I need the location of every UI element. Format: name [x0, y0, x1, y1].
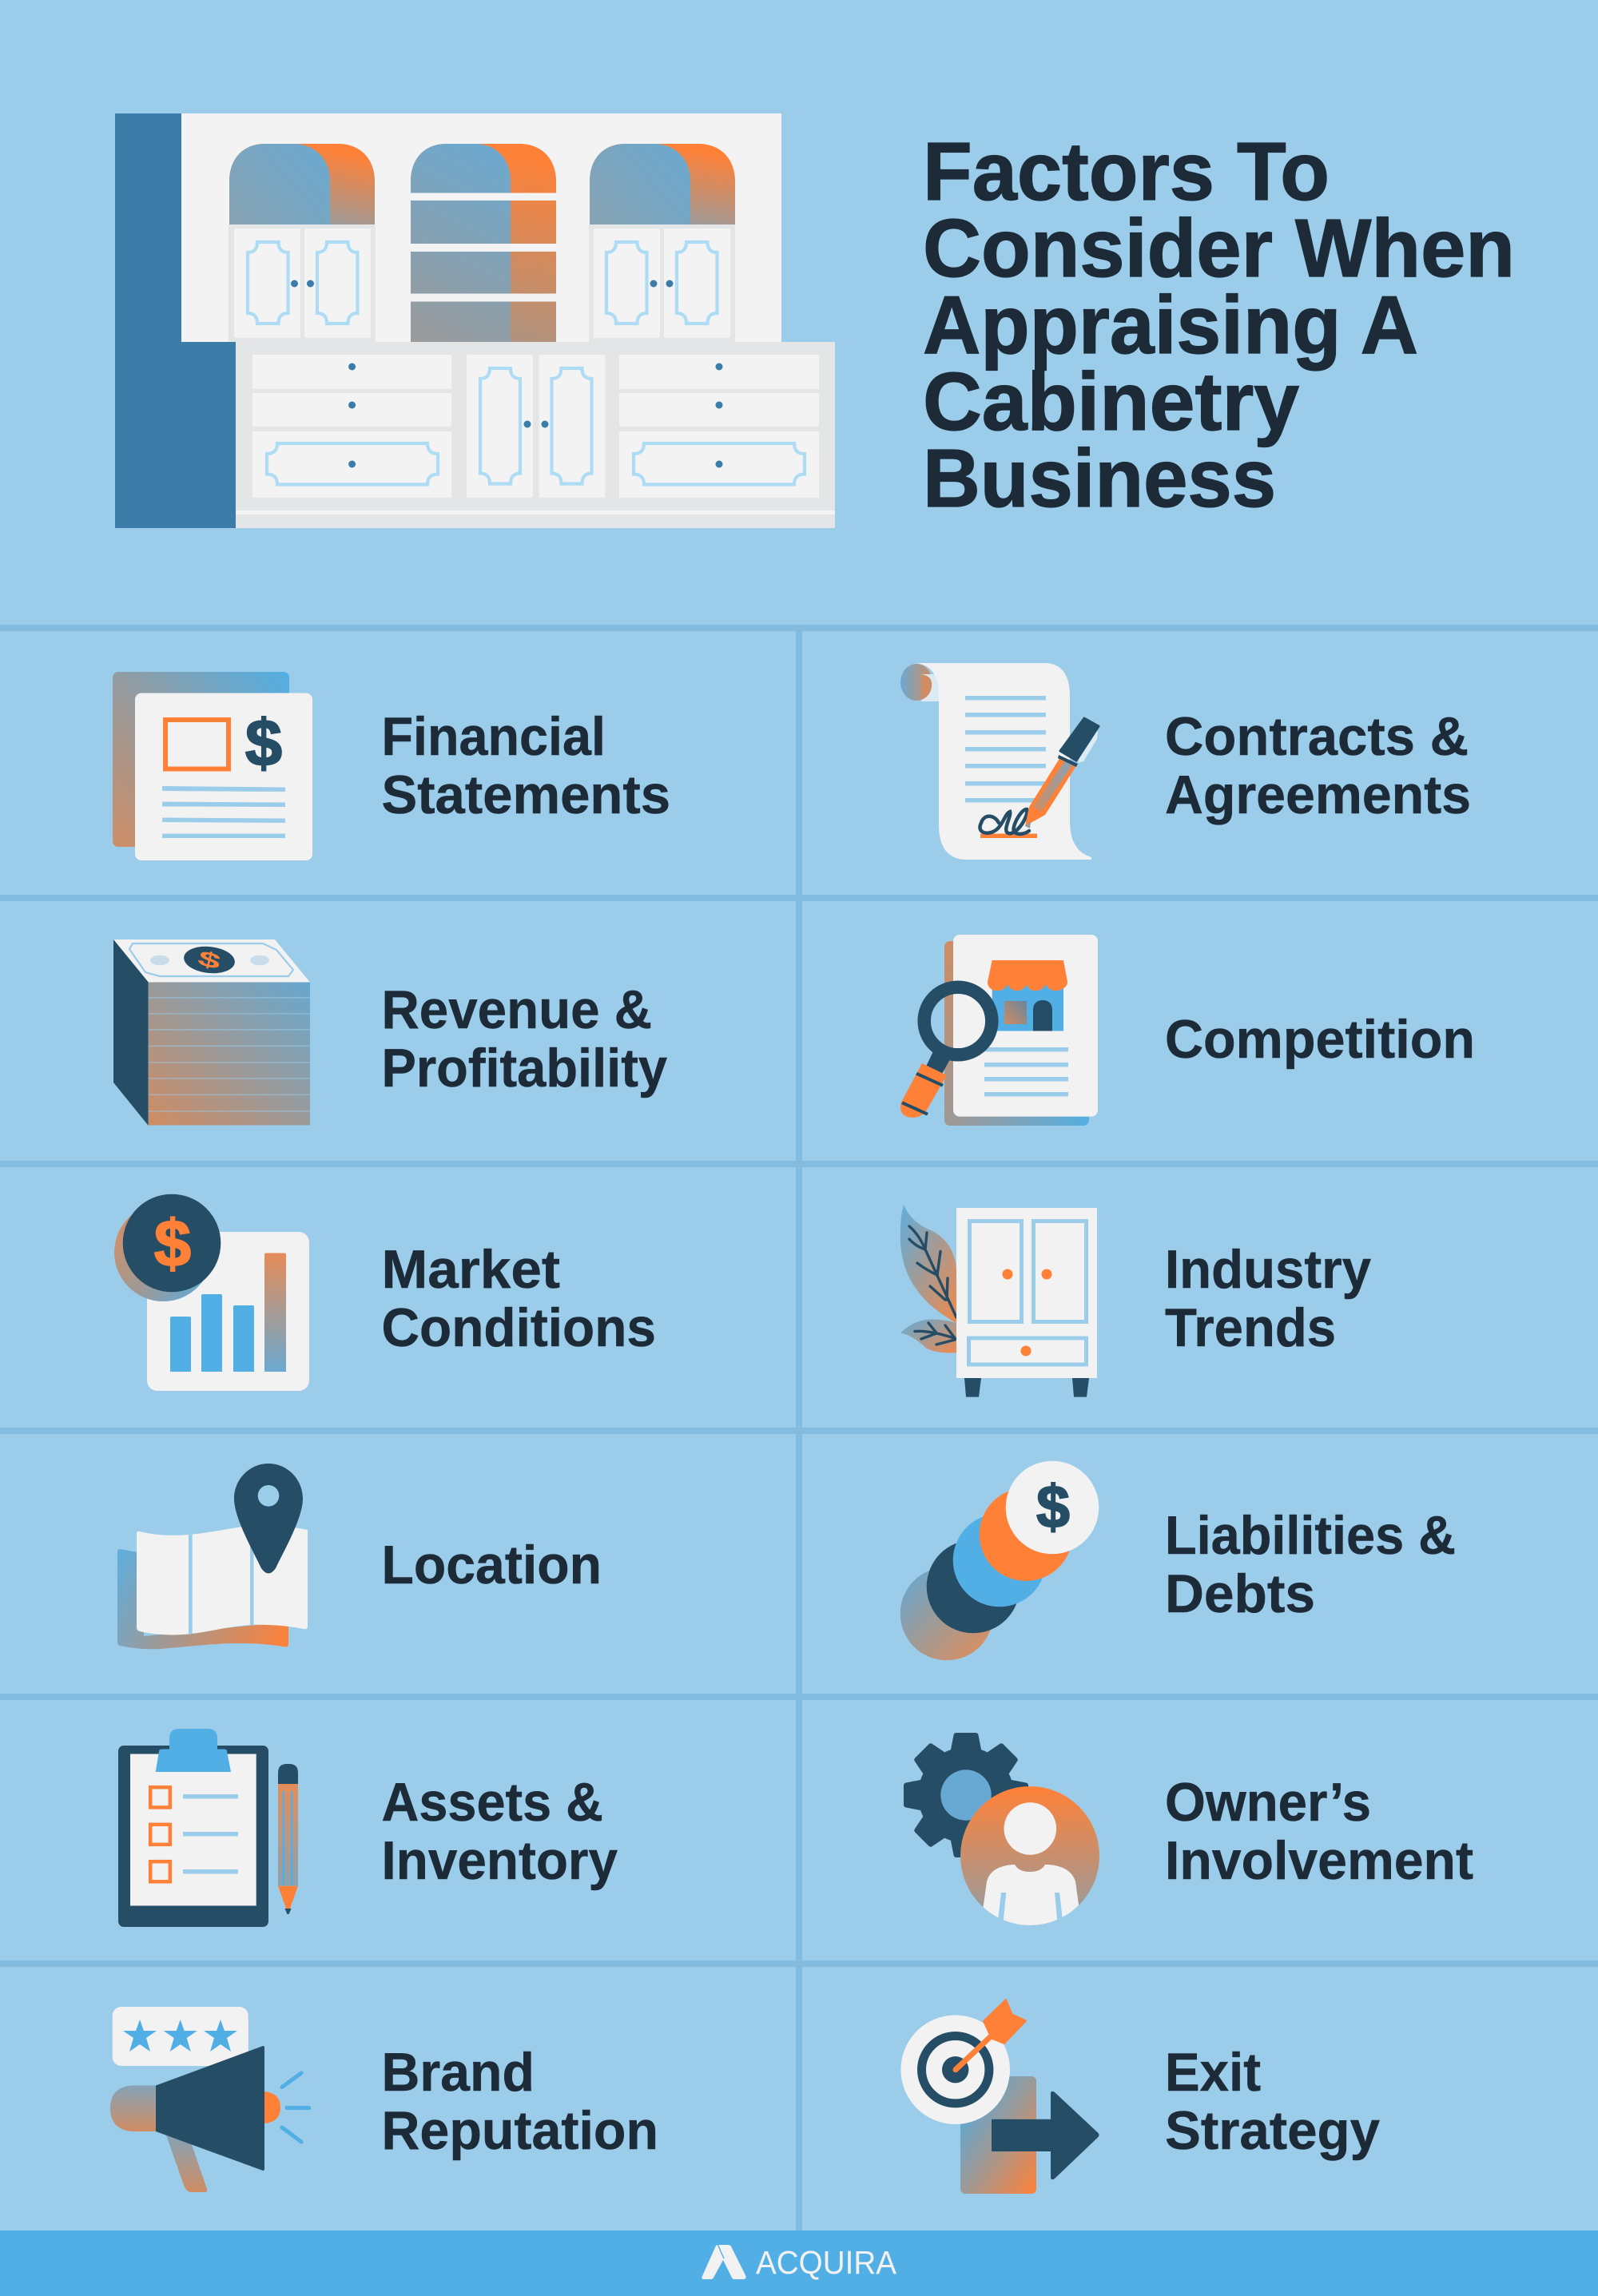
label: Competition: Competition: [1165, 1010, 1475, 1070]
label: Revenue & Profitability: [382, 980, 667, 1098]
label: Market Conditions: Conditions: [382, 1298, 656, 1358]
label: Contracts & Agreements: Contracts &: [1165, 707, 1469, 767]
title: [923, 125, 1515, 524]
label: Brand Reputation: Brand: [382, 2043, 535, 2103]
label: Assets & Inventory: [382, 1773, 618, 1891]
icon: location map: [117, 1464, 308, 1649]
right arch with doors: [589, 144, 735, 342]
icon: contracts: [900, 663, 1099, 860]
icon: market conditions: [114, 1194, 309, 1391]
label: Financial Statements: Statements: [382, 765, 670, 825]
label: Owner's Involvement: Involvement: [1165, 1831, 1473, 1891]
label: Liabilities & Debts: Debts: [1165, 1564, 1315, 1624]
label: Assets & Inventory: Assets &: [382, 1773, 603, 1833]
label: Industry Trends: [1165, 1240, 1371, 1358]
icon: owner gear and person: [904, 1733, 1099, 1933]
icon: money stack: $: [196, 945, 223, 974]
label: Exit Strategy: Exit: [1165, 2043, 1261, 2103]
logo wordmark: ACQUIRA: [756, 2244, 897, 2281]
icon: money stack: [113, 939, 310, 1126]
icon: financial statements: $: [245, 706, 282, 780]
icon: Acquira logo mark: [702, 2245, 746, 2279]
icon: liabilities stacked coins: [900, 1461, 1099, 1660]
illustration: cabinetry hutch: [115, 113, 835, 528]
icon: competition: [900, 935, 1098, 1126]
title: Cabinetry: [923, 356, 1299, 447]
pen: [1025, 718, 1099, 828]
label: Liabilities & Debts: Liabilities &: [1165, 1506, 1456, 1566]
label: Financial Statements: [382, 707, 670, 825]
title: Factors To: [923, 125, 1330, 217]
label: Exit Strategy: Strategy: [1165, 2101, 1380, 2161]
label: Assets & Inventory: Inventory: [382, 1831, 618, 1891]
icon: liabilities stacked coins: $: [1036, 1473, 1070, 1540]
lower cabinet: [236, 342, 835, 528]
label: Contracts & Agreements: [1165, 707, 1471, 825]
label: Liabilities & Debts: [1165, 1506, 1456, 1624]
label: Brand Reputation: Reputation: [382, 2101, 658, 2161]
label: Market Conditions: [382, 1240, 656, 1358]
left arch with doors: [229, 144, 376, 342]
label: Exit Strategy: [1165, 2043, 1380, 2161]
label: Location: Location: [382, 1535, 602, 1595]
title: Appraising A: [923, 279, 1418, 371]
middle open shelves: [411, 144, 556, 342]
label: Financial Statements: Financial: [382, 707, 606, 767]
icon: financial statements: [113, 672, 312, 860]
label: Market Conditions: Market: [382, 1240, 560, 1300]
label: Industry Trends: Trends: [1165, 1298, 1336, 1358]
label: Industry Trends: Industry: [1165, 1240, 1371, 1300]
label: Owner's Involvement: Owner’s: [1165, 1773, 1371, 1833]
title: Consider When: [923, 202, 1515, 294]
icon: exit strategy target and arrow: [900, 2000, 1099, 2194]
label: Contracts & Agreements: Agreements: [1165, 765, 1471, 825]
title: Business: [923, 432, 1276, 524]
label: Revenue & Profitability: Profitability: [382, 1039, 667, 1098]
label: Owner's Involvement: [1165, 1773, 1473, 1891]
icon: market conditions: $: [154, 1206, 191, 1281]
icon: brand reputation megaphone: [110, 2007, 309, 2192]
icon: industry trends: [900, 1205, 1097, 1397]
footer bar: [0, 2230, 1598, 2296]
pencil: [278, 1764, 298, 1914]
label: Revenue & Profitability: Revenue &: [382, 980, 652, 1040]
icon: assets clipboard: [118, 1729, 298, 1927]
label: Brand Reputation: [382, 2043, 658, 2161]
